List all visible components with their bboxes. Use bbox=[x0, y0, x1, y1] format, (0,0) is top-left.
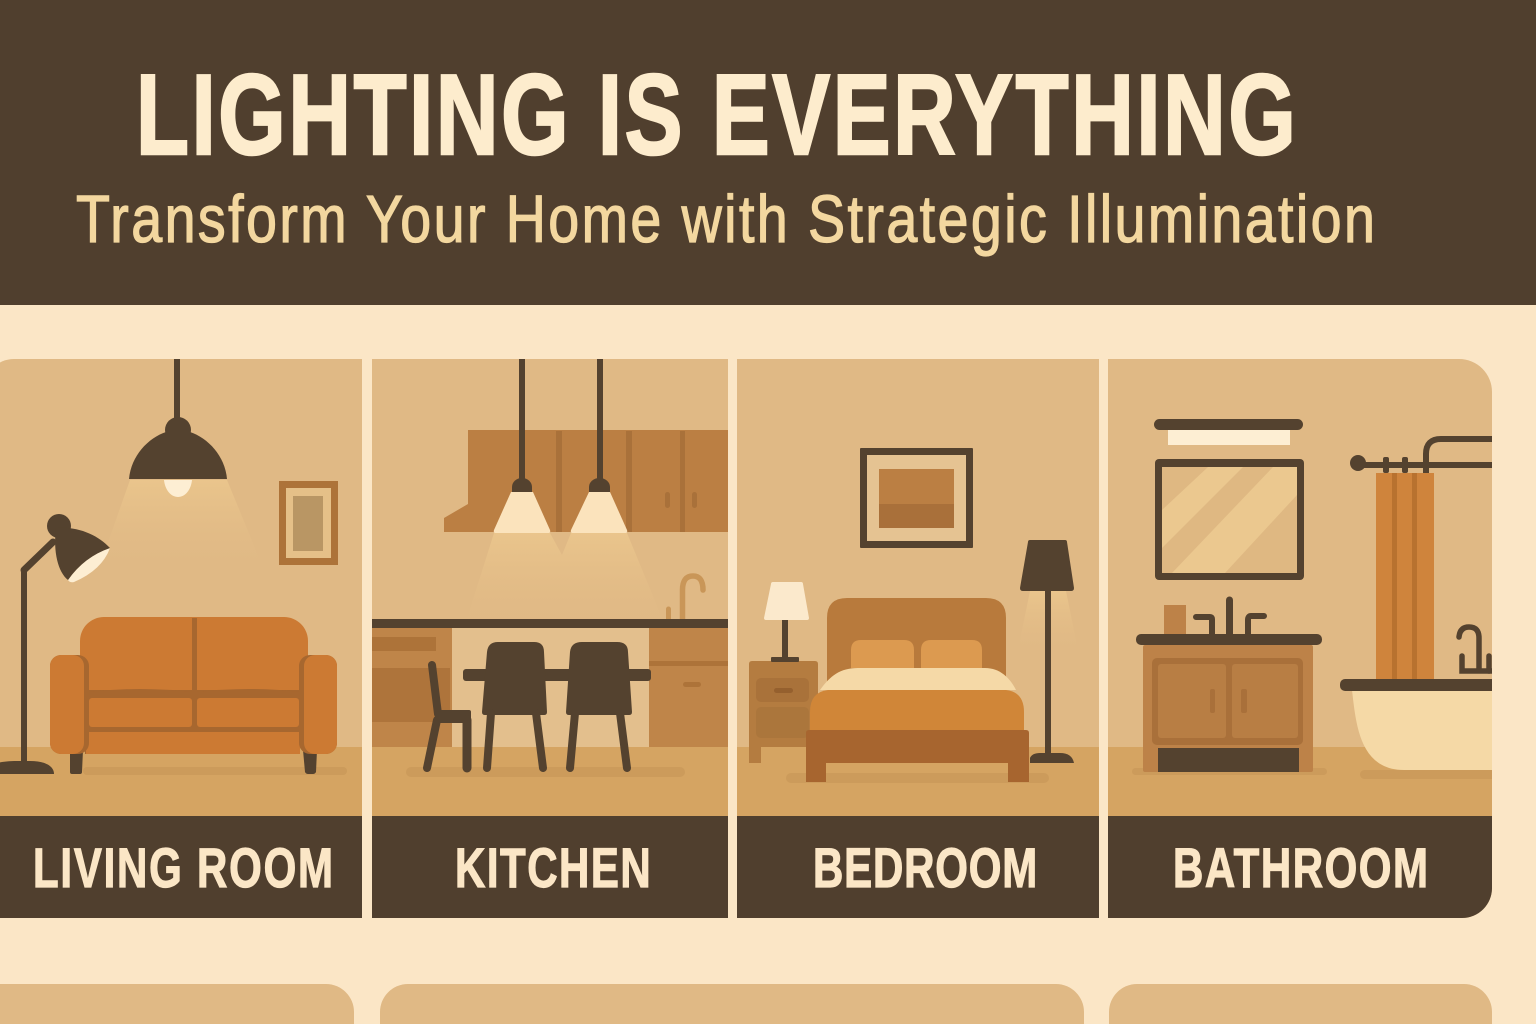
floor bbox=[0, 747, 362, 816]
label band: bathroom bbox=[1108, 816, 1492, 918]
floor shadows bbox=[1132, 768, 1500, 779]
bed bbox=[806, 598, 1029, 782]
dining set bbox=[427, 642, 651, 768]
label: KITCHEN bbox=[455, 837, 651, 899]
light cones bbox=[465, 533, 665, 625]
bottom card: left bbox=[0, 984, 354, 1024]
vanity faucet bbox=[1196, 600, 1264, 634]
panel: bathroom bbox=[1108, 359, 1510, 918]
vanity light bbox=[1154, 419, 1303, 445]
label band: living room bbox=[0, 816, 362, 918]
header banner bbox=[0, 0, 1536, 305]
label: BEDROOM bbox=[813, 837, 1037, 899]
panel: bedroom bbox=[737, 359, 1099, 918]
light cone bbox=[124, 480, 233, 498]
label band: bedroom bbox=[737, 816, 1099, 918]
sofa bbox=[50, 617, 337, 774]
tub faucet bbox=[1459, 627, 1498, 671]
shower curtain bbox=[1376, 473, 1434, 679]
wall art bbox=[860, 448, 973, 548]
curtain rod bbox=[1350, 439, 1500, 473]
chair: left profile bbox=[427, 665, 471, 768]
icon: floor lamp bbox=[0, 514, 110, 774]
label: LIVING ROOM bbox=[33, 837, 333, 899]
subtitle: Transform Your Home with Strategic Illumination bbox=[76, 182, 1375, 257]
pillows bbox=[851, 640, 982, 668]
floor shadow bbox=[406, 767, 685, 777]
floor shadow bbox=[786, 773, 1049, 783]
floor bbox=[1108, 747, 1492, 816]
bottom card: middle bbox=[380, 984, 1084, 1024]
table lamp bbox=[764, 582, 809, 662]
cup bbox=[1164, 605, 1186, 634]
title: LIGHTING IS EVERYTHING bbox=[136, 52, 1296, 179]
panel: kitchen bbox=[372, 359, 728, 918]
floor lamp bbox=[1018, 540, 1078, 763]
chair: middle bbox=[482, 642, 547, 768]
lower cabinets bbox=[372, 628, 728, 747]
vanity bbox=[1136, 634, 1322, 772]
floor bbox=[737, 747, 1099, 816]
label band: kitchen bbox=[372, 816, 728, 918]
mirror bbox=[1155, 459, 1304, 580]
nightstand bbox=[749, 661, 818, 763]
panel: living room bbox=[0, 359, 362, 918]
upper cabinets bbox=[444, 430, 728, 532]
counter bbox=[372, 619, 728, 628]
label: BATHROOM bbox=[1173, 837, 1428, 899]
floor shadow bbox=[83, 767, 347, 775]
floor bbox=[372, 747, 728, 816]
wall picture bbox=[279, 481, 338, 565]
icon: pendant lamp bbox=[129, 359, 227, 497]
bottom card: right bbox=[1109, 984, 1492, 1024]
bathtub bbox=[1340, 679, 1492, 770]
pendant lamps bbox=[494, 359, 627, 533]
chair: right bbox=[566, 642, 632, 768]
faucet bbox=[668, 576, 703, 619]
